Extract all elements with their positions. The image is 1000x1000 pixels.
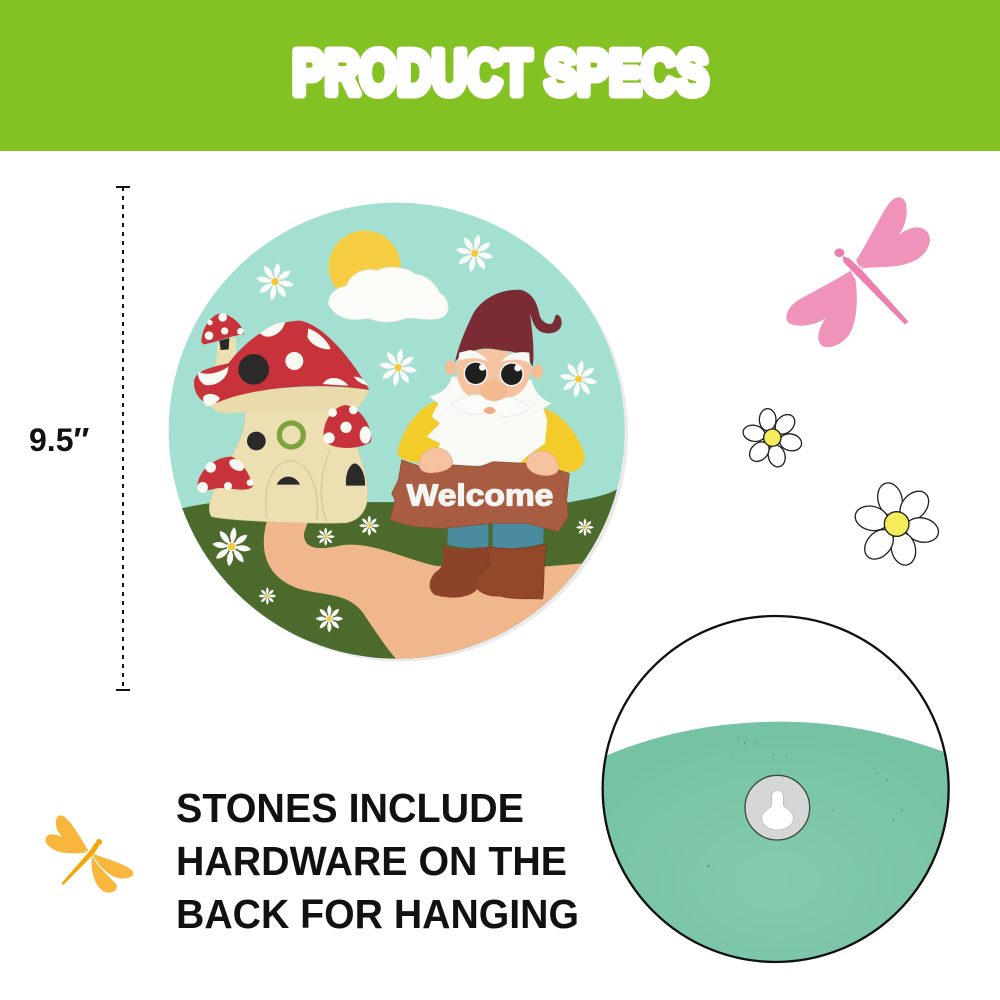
cap underside [210,387,369,413]
trousers [447,523,544,548]
speckles [707,737,903,867]
left mini mushroom [197,457,253,490]
hat [455,290,562,367]
right mini mushroom [324,405,371,448]
boots [430,545,490,598]
gnome [390,290,585,599]
moustache [452,395,530,416]
eyebrows [458,350,530,363]
small top mushroom [201,313,244,344]
pink dragonfly [786,197,930,347]
small outlined flower [742,409,803,469]
large outlined flower [853,480,941,568]
hanging note: STONES INCLUDE [176,785,524,831]
ears [445,360,456,375]
ground [182,489,617,659]
keyhole plate [745,775,810,840]
mushroom house [194,313,371,523]
orange dragonfly [45,815,133,893]
nose [480,381,508,401]
upper body [397,290,585,472]
inset: back of stone [600,616,953,967]
keyhole [762,790,793,830]
green back [600,722,953,967]
sleeves [397,402,454,465]
sky [160,200,643,667]
face [457,349,532,401]
eyes [464,361,488,385]
cap spots [198,322,367,406]
sun [328,230,401,289]
daisies [210,231,601,632]
garden path [264,520,603,662]
chimney [214,336,236,367]
hands [419,448,558,476]
dimension line [116,187,130,690]
title: PRODUCT SPECS [292,39,708,108]
hanging note: HARDWARE ON THE [176,838,567,884]
title banner [0,0,1000,151]
inset ring [603,616,949,962]
hanging note: BACK FOR HANGING [176,891,579,937]
beard [427,377,552,466]
red cap [194,321,369,405]
cloud [328,267,448,322]
welcome sign [390,460,569,532]
windows [247,432,266,450]
dimension label: 9.5″ [29,421,89,458]
stem [209,402,368,523]
hanging note [176,785,579,937]
stepping stone product [160,200,643,667]
sign text: Welcome [407,479,553,513]
door [266,461,317,520]
